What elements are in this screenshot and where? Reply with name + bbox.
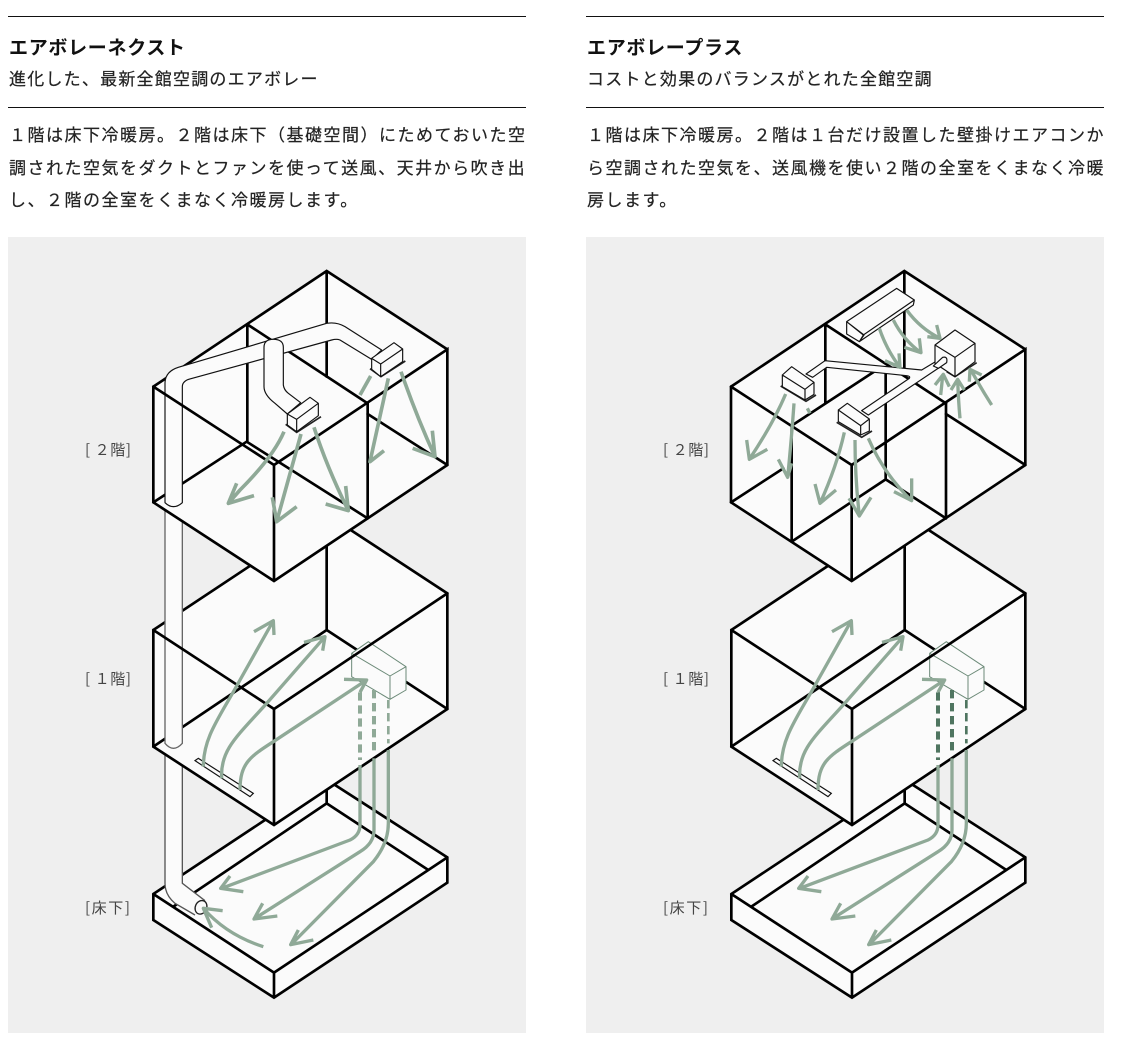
ceiling unit 1 xyxy=(286,397,321,432)
basement arrows xyxy=(799,750,966,945)
subheading: コストと効果のバランスがとれた全館空調 xyxy=(587,65,933,90)
panel: left diagram エアボレーネクスト xyxy=(8,237,526,1033)
main duct xyxy=(165,323,382,507)
body text: 房します。 xyxy=(587,186,678,211)
panel: right diagram エアボレープラス xyxy=(586,237,1104,1033)
wall-mounted air conditioner xyxy=(847,288,914,342)
body text: し、２階の全室をくまなく冷暖房します。 xyxy=(9,186,359,211)
cube unit xyxy=(935,330,977,377)
second floor box xyxy=(731,271,1025,581)
first floor box xyxy=(731,515,1025,825)
ceiling unit B xyxy=(837,403,872,437)
ceiling unit A xyxy=(781,367,816,401)
second floor box xyxy=(153,271,447,581)
label: left underfloor: [床下] xyxy=(85,897,132,918)
first floor front edges xyxy=(153,530,447,825)
heading: エアボレープラス: エアボレープラス xyxy=(587,33,743,60)
floor-standing air conditioner xyxy=(352,642,406,699)
label: right underfloor: [床下] xyxy=(663,897,710,918)
basement arrows xyxy=(203,750,388,947)
first floor box xyxy=(153,515,447,825)
label: left 1F: [ １階] xyxy=(85,668,132,689)
body text xyxy=(587,121,1105,211)
panel: right header text xyxy=(586,16,1105,211)
floor-standing air conditioner xyxy=(930,642,984,699)
first floor arrows and dashed lines xyxy=(781,621,966,790)
body text: 調された空気をダクトとファンを使って送風、天井から吹き出 xyxy=(9,154,526,179)
connecting duct xyxy=(806,357,947,415)
floor vent slot xyxy=(773,758,831,797)
body text: ら空調された空気を、送風機を使い２階の全室をくまなく冷暖 xyxy=(587,154,1105,179)
panel: left header text xyxy=(8,16,526,211)
label: left 2F: [ ２階] xyxy=(85,439,132,460)
body text xyxy=(9,121,526,211)
body text: １階は床下冷暖房。２階は床下（基礎空間）にためておいた空 xyxy=(9,121,526,146)
heading: エアボレーネクスト: エアボレーネクスト xyxy=(9,33,186,60)
body text: １階は床下冷暖房。２階は１台だけ設置した壁掛けエアコンか xyxy=(587,121,1105,146)
basement box xyxy=(731,778,1025,998)
label: right 1F: [ １階] xyxy=(663,668,710,689)
lower duct xyxy=(165,740,209,916)
second floor arrows xyxy=(747,310,992,516)
second floor arrows xyxy=(228,372,435,522)
middle duct xyxy=(165,497,182,748)
basement box xyxy=(153,778,447,998)
label: right 2F: [ ２階] xyxy=(663,439,710,460)
ceiling unit 2 xyxy=(370,343,405,377)
subheading: 進化した、最新全館空調のエアボレー xyxy=(9,65,319,90)
duct end over cube xyxy=(933,357,947,368)
branch duct xyxy=(264,339,301,414)
floor vent slot xyxy=(195,758,253,797)
first floor arrows and dashed lines xyxy=(203,621,388,790)
